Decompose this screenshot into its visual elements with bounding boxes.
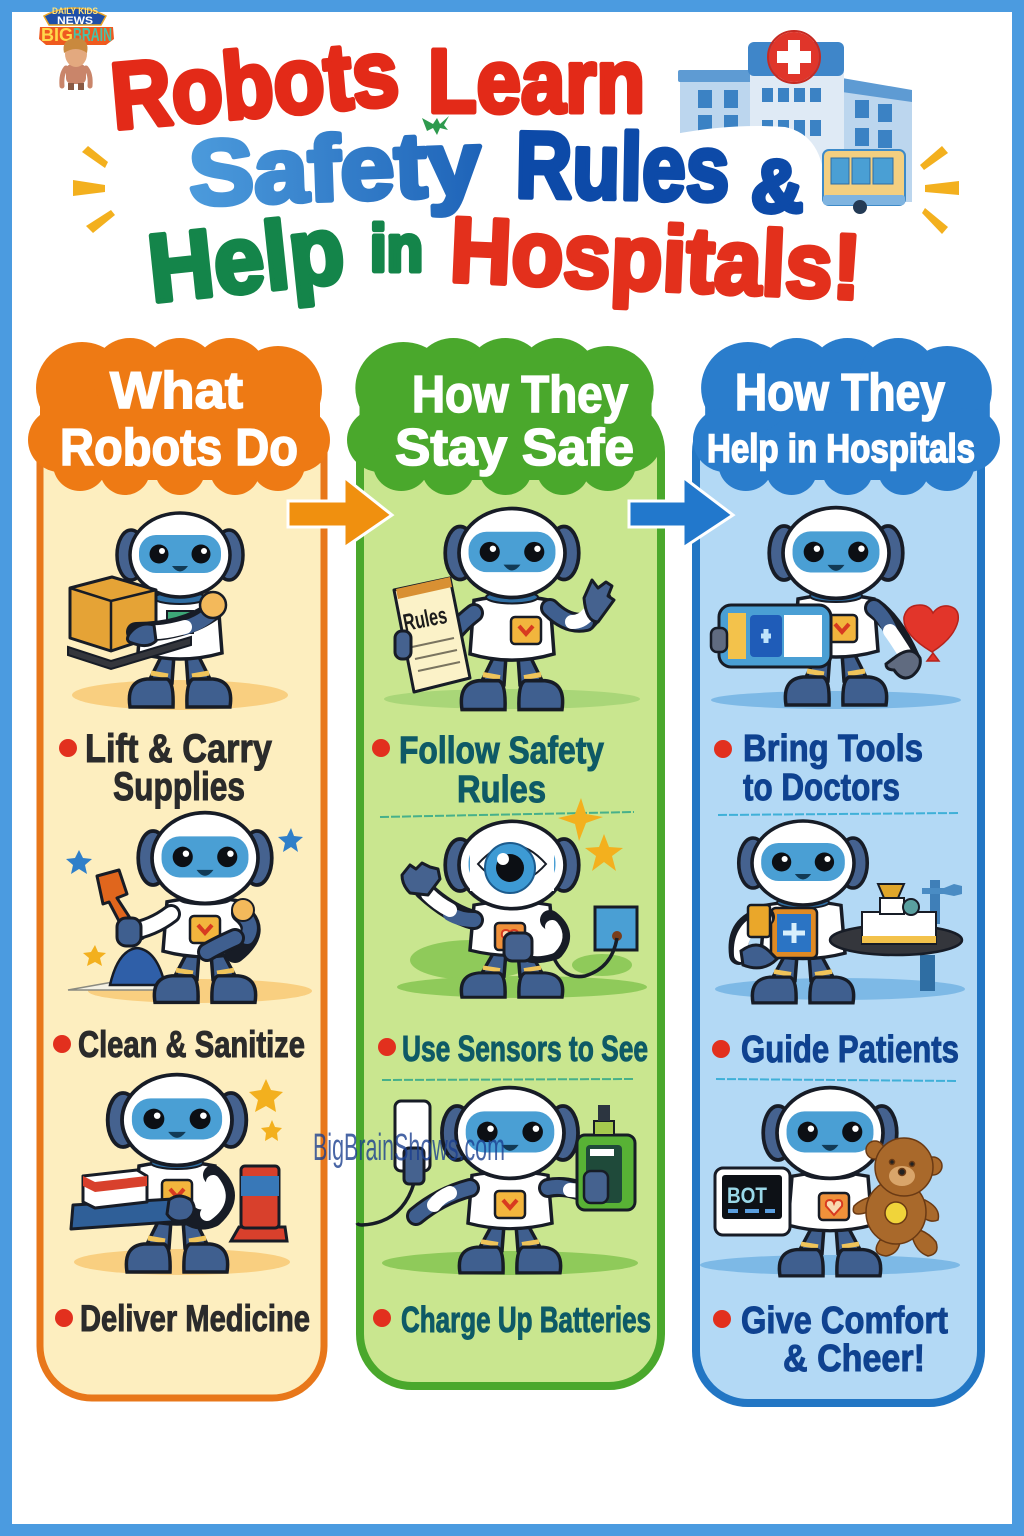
sun rays right xyxy=(920,146,959,234)
label: use sensors to see xyxy=(378,1028,648,1069)
logo: Daily Kids News with Big Brain xyxy=(39,6,114,90)
label: guide patients: Guide Patients xyxy=(741,1029,959,1071)
label: give comfort and cheer: Give Comfort xyxy=(741,1300,948,1342)
label: follow safety rules xyxy=(372,730,604,811)
label: give comfort and cheer xyxy=(713,1300,948,1380)
heading: what robots do xyxy=(28,338,330,495)
heading: how they stay safe xyxy=(347,338,662,495)
label: lift and carry supplies xyxy=(59,727,273,809)
icon: hospital building xyxy=(678,31,912,202)
heading: how they help in hospitals: How They xyxy=(735,364,945,422)
label: bring tools to doctors: to Doctors xyxy=(743,767,900,809)
title: Learn xyxy=(428,32,645,132)
logo: Daily Kids News with Big Brain: BIG xyxy=(41,25,73,45)
robot: guide patients with table xyxy=(715,821,965,1003)
robot: cleaning xyxy=(68,813,312,1003)
label: charge up batteries xyxy=(373,1299,651,1340)
title xyxy=(107,19,863,323)
heading: how they stay safe: Stay Safe xyxy=(395,419,634,477)
label: follow safety rules: Rules xyxy=(457,769,546,811)
label: bring tools to doctors: Bring Tools xyxy=(743,728,923,770)
label: deliver medicine: Deliver Medicine xyxy=(80,1298,310,1339)
white title cutout xyxy=(670,126,825,227)
icon: wall plug and cable xyxy=(553,907,637,977)
robot: holding rules clipboard xyxy=(384,508,640,710)
icon: sparkles around cleaning robot xyxy=(66,828,303,966)
label: bring tools to doctors xyxy=(714,728,923,809)
label: use sensors to see: Use Sensors to See xyxy=(402,1028,648,1069)
panel: how they help in hospitals xyxy=(696,400,981,1403)
label: lift and carry supplies: Supplies xyxy=(113,765,245,809)
title: & xyxy=(751,145,803,228)
icon: teddy bear xyxy=(853,1138,942,1256)
arrow: blue xyxy=(629,477,733,548)
icon: patient monitor xyxy=(715,1168,790,1235)
panel: how they stay safe xyxy=(360,400,661,1386)
icon: yellow stars xyxy=(558,798,623,871)
title: Robots xyxy=(107,19,403,149)
title: Help xyxy=(143,196,349,323)
robot: sensors eye xyxy=(397,821,647,998)
heading: what robots do: What xyxy=(110,362,243,420)
label: charge up batteries: Charge Up Batteries xyxy=(401,1299,651,1340)
arrow: orange xyxy=(288,477,392,548)
icon: red heart balloon xyxy=(904,605,958,661)
robot: lifting box xyxy=(68,513,288,710)
label: lift and carry supplies: Lift & Carry xyxy=(85,727,273,771)
panel: what robots do xyxy=(40,400,324,1398)
heading: how they help in hospitals xyxy=(693,338,1000,495)
robot: comfort with monitor xyxy=(700,1088,960,1276)
logo: Daily Kids News with Big Brain: NEWS xyxy=(57,15,93,27)
logo: Daily Kids News with Big Brain: DAILY KIDS xyxy=(52,6,98,16)
label: give comfort and cheer: & Cheer! xyxy=(783,1338,925,1380)
logo: Daily Kids News with Big Brain: BRAIN xyxy=(73,25,112,45)
label: follow safety rules: Follow Safety xyxy=(399,730,604,772)
title: Safety xyxy=(187,113,483,225)
watermark: BigBrainShows.com xyxy=(313,1127,505,1169)
robot: charging xyxy=(357,1088,638,1275)
icon: bus xyxy=(823,150,905,214)
heading: what robots do: Robots Do xyxy=(60,419,298,477)
sun rays left xyxy=(73,146,115,233)
icon: patient monitor: BOT xyxy=(727,1183,767,1208)
heading: how they help in hospitals: Help in Hospitals xyxy=(707,427,975,471)
robot: bringing tools tablet xyxy=(711,508,961,709)
icon: green leaf sprig xyxy=(422,116,449,135)
robot: delivering medicine xyxy=(71,1075,290,1275)
title: Hospitals! xyxy=(448,199,863,319)
heading: how they stay safe: How They xyxy=(412,366,628,424)
icon: table with medical tools xyxy=(830,880,962,991)
title: in xyxy=(370,211,423,285)
icon: stars near medicine xyxy=(249,1079,283,1141)
label: clean and sanitize: Clean & Sanitize xyxy=(78,1024,305,1065)
title: Rules xyxy=(515,112,730,221)
robot: holding rules clipboard: Rules xyxy=(401,602,449,637)
